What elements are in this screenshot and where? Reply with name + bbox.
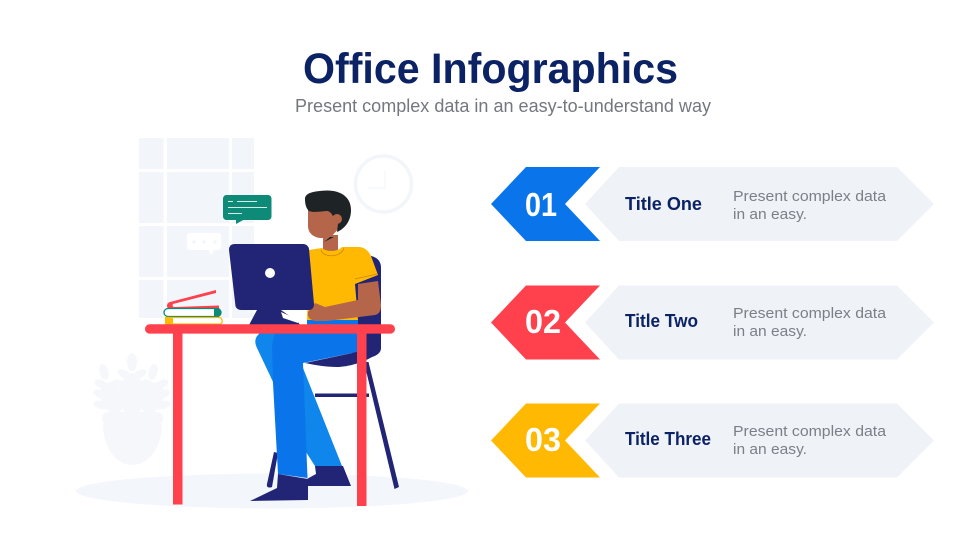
item 2 bbox=[491, 286, 934, 360]
white speech bubble bbox=[187, 233, 221, 255]
description 03: in an easy. bbox=[733, 441, 807, 458]
chair seat bbox=[305, 352, 372, 367]
description 02: in an easy. bbox=[733, 323, 807, 340]
title two: Title Two bbox=[625, 310, 698, 331]
number 01: 01 bbox=[525, 186, 557, 223]
front leg of trousers bbox=[272, 333, 357, 478]
arm bbox=[308, 281, 381, 321]
title one: Title One bbox=[625, 193, 702, 214]
plant bbox=[92, 353, 172, 465]
head bbox=[305, 190, 351, 242]
subtitle: Present complex data in an easy-to-understand way bbox=[295, 95, 712, 116]
panel 01 bbox=[585, 167, 934, 241]
back shoe bbox=[307, 466, 351, 486]
neck bbox=[323, 235, 338, 255]
desk bbox=[145, 324, 395, 506]
title: Office Infographics bbox=[303, 45, 678, 93]
shirt details bbox=[321, 248, 377, 279]
number chevron 03 bbox=[491, 404, 600, 478]
number chevron 01 bbox=[491, 167, 600, 241]
description 01: Present complex data bbox=[733, 188, 887, 205]
item 1 bbox=[491, 167, 934, 241]
clock bbox=[356, 156, 412, 212]
title three: Title Three bbox=[625, 428, 711, 449]
description 01: in an easy. bbox=[733, 206, 807, 223]
window bbox=[139, 138, 254, 318]
teal speech bubble bbox=[223, 195, 272, 224]
back leg of trousers bbox=[255, 333, 342, 466]
panel 03 bbox=[585, 404, 934, 478]
number 03: 03 bbox=[525, 421, 561, 458]
description 03: Present complex data bbox=[733, 423, 887, 440]
description 02: Present complex data bbox=[733, 305, 887, 322]
item 3 bbox=[491, 404, 934, 478]
number chevron 02 bbox=[491, 286, 600, 360]
number 02: 02 bbox=[525, 303, 561, 340]
front shoe bbox=[250, 474, 308, 501]
chair back and legs bbox=[267, 255, 399, 489]
trouser waistband bbox=[307, 320, 358, 325]
ground shadow bbox=[76, 474, 468, 508]
stack of books bbox=[164, 290, 222, 324]
yellow shirt bbox=[307, 247, 378, 320]
illustration: office worker at desk bbox=[76, 138, 468, 508]
computer monitor bbox=[229, 244, 314, 325]
panel 02 bbox=[585, 286, 934, 360]
